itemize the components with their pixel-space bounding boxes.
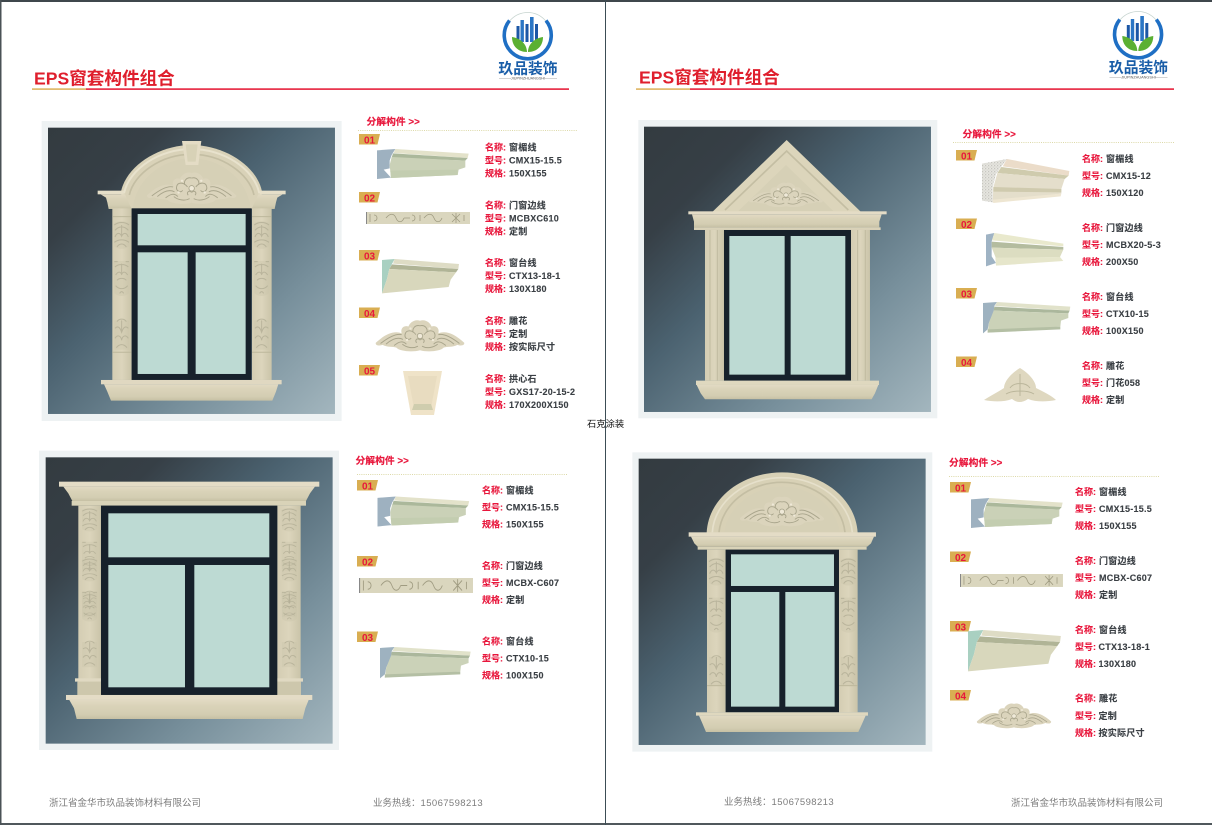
- component 02: MCBXC610: [509, 214, 559, 224]
- window frame and glass: [132, 208, 252, 380]
- component 03: 03: [364, 252, 375, 262]
- component 03: 100X150: [1106, 326, 1144, 336]
- component 03: 100X150: [506, 670, 544, 680]
- component 03: 型号:: [482, 652, 503, 664]
- component 01: 型号:: [482, 502, 503, 512]
- window frame and glass: [101, 506, 277, 695]
- component 04: 名称:: [485, 315, 506, 326]
- component 03: 窗台线: [506, 636, 534, 646]
- heading: 分解构件 >>: [962, 128, 1016, 140]
- footer company right: 浙江省金华市玖品装饰材料有限公司: [1011, 797, 1163, 809]
- component 01: 150X120: [1106, 188, 1144, 198]
- triangular pediment: [713, 140, 861, 212]
- component 01: 01: [364, 136, 375, 146]
- component 03: 名称:: [1082, 291, 1103, 302]
- logo: left: [498, 12, 558, 80]
- component 03: 型号:: [485, 270, 506, 281]
- component 01: 01: [955, 484, 966, 494]
- component 01: 名称:: [1082, 153, 1103, 164]
- window frame and glass: [724, 230, 851, 381]
- component 05: 规格:: [485, 399, 506, 410]
- window sill: [101, 380, 282, 401]
- center caption: 石克涂装: [587, 418, 624, 429]
- component 02: [359, 192, 559, 236]
- component 04: [359, 308, 555, 352]
- component 01: 型号:: [1082, 170, 1103, 181]
- component 02: 门窗边线: [1099, 555, 1136, 566]
- component 02: 定制: [1099, 589, 1118, 600]
- component 02: MCBX20-5-3: [1106, 240, 1161, 250]
- component 05: 170X200X150: [509, 400, 569, 410]
- component 02: 定制: [506, 594, 525, 605]
- heading: 分解构件 >>: [366, 115, 420, 128]
- component 01: CMX15-15.5: [509, 156, 562, 166]
- component 01: CMX15-15.5: [1099, 504, 1152, 514]
- component 01: 窗楣线: [1106, 153, 1134, 164]
- title underline: [636, 88, 1174, 90]
- component 01: 01: [961, 152, 972, 162]
- component 02: 规格:: [482, 594, 503, 605]
- component 05: 拱心石: [509, 373, 537, 384]
- component 03: 名称:: [482, 636, 503, 646]
- title: EPS窗套构件组合: [639, 68, 780, 88]
- component 02: MCBX-C607: [1099, 573, 1152, 583]
- component 03: CTX10-15: [506, 654, 549, 664]
- component 01: 150X155: [506, 520, 544, 530]
- component 05: GXS17-20-15-2: [509, 387, 575, 397]
- component 04: 雕花: [1106, 360, 1125, 371]
- component 02: 名称:: [1075, 555, 1096, 566]
- component 01: 规格:: [482, 518, 503, 530]
- component 02: 型号:: [1082, 239, 1103, 250]
- component 01: CMX15-15.5: [506, 502, 559, 512]
- component 04: 定制: [509, 328, 528, 339]
- footer hotline right: 业务热线：15067598213: [724, 796, 834, 808]
- component 02: [956, 218, 1161, 267]
- component 05: [359, 365, 575, 415]
- cornice: [689, 532, 876, 550]
- window surround columns: [112, 208, 272, 380]
- component 03: 窗台线: [1106, 291, 1134, 302]
- component 02: 规格:: [485, 226, 506, 236]
- logo subtitle: JIUPINZHUANGSHI: [1121, 76, 1156, 80]
- component 01: [956, 150, 1151, 203]
- component 04: 型号:: [1082, 377, 1103, 388]
- component 02: 规格:: [1075, 589, 1096, 600]
- component 03: 名称:: [1075, 624, 1096, 635]
- component 04: 定制: [1106, 394, 1125, 405]
- component 03: 窗台线: [509, 257, 537, 268]
- component 04: 04: [955, 692, 966, 702]
- window frame and glass: [726, 550, 839, 712]
- component 03: 03: [961, 290, 972, 300]
- component 01: [359, 134, 562, 179]
- component 01: 规格:: [1075, 520, 1096, 531]
- component 02: 02: [961, 220, 972, 231]
- component 04: 定制: [1098, 710, 1117, 721]
- component 01: [950, 482, 1152, 531]
- component 01: [357, 480, 559, 530]
- component 03: 名称:: [485, 257, 506, 268]
- ornament: pediment carving: [749, 183, 823, 207]
- component 02: 定制: [509, 226, 528, 236]
- icon: logo circle: [504, 12, 551, 60]
- window surround columns: [707, 550, 858, 712]
- component 02: 02: [955, 553, 966, 564]
- component 01: 窗楣线: [506, 484, 534, 496]
- semicircular pediment: [707, 472, 858, 533]
- icon: logo circle: [1114, 12, 1162, 58]
- component 03: CTX10-15: [1106, 309, 1149, 319]
- component 04: 名称:: [1075, 692, 1096, 704]
- component 02: MCBX-C607: [506, 578, 559, 588]
- window sill: [696, 712, 868, 732]
- component 04: 04: [961, 358, 972, 369]
- component 04: 名称:: [1082, 360, 1103, 371]
- component 01: 150X155: [1099, 521, 1137, 531]
- panel: flat-cornice window: [39, 451, 339, 750]
- window sill: [696, 381, 879, 399]
- component 03: [956, 288, 1149, 336]
- component 01: 名称:: [485, 142, 506, 152]
- component 01: CMX15-12: [1106, 171, 1151, 181]
- component 01: 01: [362, 482, 373, 492]
- component 04: 04: [364, 309, 375, 320]
- component 02: 门窗边线: [506, 560, 543, 571]
- component 04: [956, 356, 1140, 405]
- component 02: 名称:: [1082, 222, 1103, 233]
- component 03: 03: [955, 622, 966, 634]
- component 02: 门窗边线: [1106, 222, 1143, 233]
- component 01: 型号:: [485, 154, 506, 166]
- component 04: 规格:: [1075, 727, 1096, 738]
- component 04: 按实际尺寸: [509, 341, 555, 352]
- logo wordmark: 玖品装饰: [498, 60, 558, 78]
- component 01: 名称:: [1075, 486, 1096, 497]
- ornament: tympanum carving: [740, 497, 824, 526]
- panel: triangular pediment window: [638, 120, 937, 418]
- component 03: 规格:: [485, 283, 506, 294]
- cornice: [59, 482, 319, 506]
- component 01: 名称:: [482, 484, 503, 496]
- heading: 分解构件 >>: [356, 454, 409, 467]
- title: EPS窗套构件组合: [34, 68, 175, 88]
- cornice: [688, 211, 887, 230]
- keystone: [182, 141, 201, 165]
- footer: [49, 796, 1163, 809]
- component 03: [357, 632, 549, 680]
- component 04: [950, 690, 1145, 738]
- component 04: 型号:: [1075, 710, 1096, 721]
- component 02: 型号:: [482, 577, 503, 588]
- logo subtitle: JIUPINZHUANGSHI: [511, 76, 545, 80]
- component 01: 型号:: [1075, 503, 1096, 514]
- component 04: 型号:: [485, 328, 506, 339]
- arch pediment: [98, 145, 286, 209]
- component 03: 型号:: [1082, 308, 1103, 319]
- component 03: [359, 250, 561, 294]
- component 02: 型号:: [1075, 572, 1096, 583]
- panel: semicircle pediment window: [632, 452, 932, 752]
- component 04: 按实际尺寸: [1098, 727, 1145, 738]
- component 02: 02: [362, 558, 373, 568]
- component 03: 03: [362, 633, 373, 644]
- component 02: 型号:: [485, 212, 506, 224]
- component 01: 150X155: [509, 168, 547, 178]
- component 01: 窗楣线: [1099, 486, 1127, 497]
- component 02: [357, 556, 559, 605]
- component 01: 规格:: [1082, 187, 1103, 198]
- component 03: 规格:: [1082, 325, 1103, 336]
- footer company left: 浙江省金华市玖品装饰材料有限公司: [49, 797, 201, 809]
- panel: components list 4: [949, 456, 1160, 738]
- component 03: 窗台线: [1099, 624, 1127, 635]
- component 04: 雕花: [509, 315, 528, 326]
- component 02: [950, 552, 1152, 600]
- component 03: [950, 621, 1150, 671]
- component 05: 05: [364, 366, 375, 378]
- logo wordmark: 玖品装饰: [1109, 60, 1168, 76]
- panel: components list 2: [953, 128, 1174, 405]
- component 02: 200X50: [1106, 257, 1139, 267]
- component 02: 门窗边线: [509, 200, 546, 210]
- component 04: 门花058: [1106, 377, 1140, 388]
- ornament: tympanum carving: [147, 172, 236, 204]
- panel: components list 3: [356, 454, 567, 680]
- component 03: 规格:: [482, 670, 503, 680]
- component 05: 型号:: [485, 386, 506, 397]
- component 03: 规格:: [1075, 658, 1096, 669]
- panel: arched window with keystone: [42, 121, 342, 421]
- component 02: 02: [364, 194, 375, 204]
- component 03: 130X180: [509, 284, 547, 294]
- window sill: [66, 695, 312, 719]
- panel: components list 1: [358, 115, 577, 415]
- component 01: 规格:: [485, 168, 506, 178]
- component 01: 窗楣线: [509, 142, 537, 152]
- component 04: 雕花: [1099, 692, 1118, 704]
- component 03: 130X180: [1098, 659, 1136, 669]
- component 05: 名称:: [485, 373, 506, 384]
- component 03: CTX13-18-1: [1098, 642, 1150, 652]
- title underline: [32, 88, 569, 90]
- logo: right: [1109, 12, 1168, 80]
- heading: 分解构件 >>: [949, 456, 1003, 469]
- component 04: 规格:: [1082, 394, 1103, 405]
- component 03: CTX13-18-1: [509, 271, 561, 281]
- component 04: 规格:: [485, 341, 506, 352]
- component 02: 名称:: [482, 560, 503, 571]
- window surround columns: [75, 506, 303, 695]
- component 02: 名称:: [485, 200, 506, 210]
- window surround columns: [705, 230, 870, 381]
- footer hotline left: 业务热线：15067598213: [373, 797, 483, 809]
- component 02: 规格:: [1082, 256, 1103, 267]
- component 03: 型号:: [1075, 641, 1096, 652]
